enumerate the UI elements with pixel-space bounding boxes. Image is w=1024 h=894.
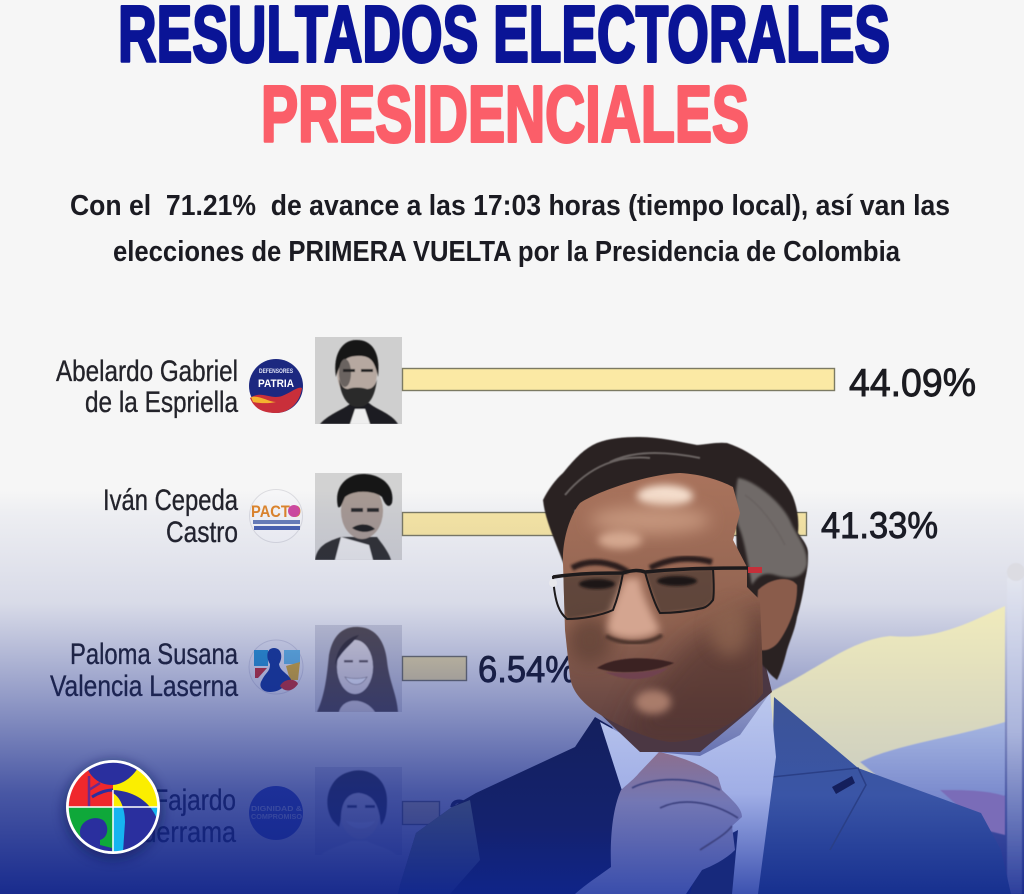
shirt bbox=[600, 693, 776, 894]
percentage: 44.09% bbox=[849, 362, 976, 405]
name: Valencia Laserna bbox=[50, 670, 238, 703]
percentage: 41.33% bbox=[821, 505, 938, 546]
name bbox=[50, 638, 238, 703]
name: Abelardo Gabriel bbox=[56, 355, 238, 388]
yellow band bbox=[770, 606, 1005, 800]
face bbox=[563, 473, 763, 742]
left sleeve bbox=[398, 800, 480, 894]
party logo: Pacto Histórico bbox=[250, 490, 302, 542]
eyes bbox=[579, 579, 615, 589]
lower-face shadow bbox=[630, 598, 763, 739]
hand bbox=[575, 752, 742, 894]
ear bbox=[754, 579, 797, 650]
row: Paloma Valencia bbox=[50, 625, 576, 712]
dark tie shadow bbox=[690, 830, 738, 894]
pole finial bbox=[1007, 563, 1024, 581]
mouth bbox=[597, 658, 674, 672]
finger lines bbox=[632, 780, 738, 850]
title: PRESIDENCIALES bbox=[261, 70, 749, 158]
subtitle: elecciones de PRIMERA VUELTA por la Presidencia de Colombia bbox=[113, 236, 901, 268]
forehead highlight bbox=[637, 485, 693, 507]
neck bbox=[598, 650, 772, 752]
row: Iván Cepeda bbox=[103, 473, 938, 560]
title bbox=[118, 0, 890, 158]
glasses bbox=[549, 568, 762, 619]
face shading bbox=[563, 480, 763, 739]
percentage: 3 bbox=[449, 793, 470, 834]
party logo: Dignidad y Compromiso: COMPROMISO bbox=[251, 814, 303, 821]
name: Valderrama bbox=[108, 816, 236, 849]
grey temple hair bbox=[736, 478, 807, 585]
eyebrows bbox=[572, 559, 712, 572]
hair bbox=[543, 437, 808, 680]
lapel notch bbox=[772, 768, 866, 850]
candidate photo bbox=[315, 767, 402, 827]
name bbox=[76, 784, 236, 849]
blue band bbox=[860, 722, 1005, 825]
five stem bbox=[89, 776, 100, 807]
spiral bbox=[80, 818, 112, 854]
candidate photo bbox=[315, 625, 402, 712]
hair strands bbox=[565, 453, 785, 545]
name: Paloma Susana bbox=[70, 638, 238, 671]
portrait: Gustavo Petro bbox=[398, 437, 1011, 894]
row: Abelardo de la Espriella bbox=[56, 337, 976, 424]
name: Iván Cepeda bbox=[103, 484, 238, 517]
party logo: Dignidad y Compromiso: DIGNIDAD & bbox=[251, 806, 302, 813]
result bar bbox=[402, 802, 440, 824]
grid lines bbox=[66, 790, 158, 854]
percentage: 6.54% bbox=[478, 649, 576, 690]
flag pole bbox=[1007, 578, 1022, 894]
subtitle: Con el 71.21% de avance a las 17:03 horas (tiempo local), así van las bbox=[70, 190, 950, 222]
name: Sergio Fajardo bbox=[76, 784, 236, 817]
channel logo: 5 bbox=[64, 760, 162, 859]
party logo: Defensores de la Patria: DEFENSORES bbox=[259, 369, 293, 375]
lens shade bbox=[553, 569, 713, 619]
result bar bbox=[402, 368, 834, 390]
blue gradient overlay bbox=[0, 490, 1024, 894]
party logo: Dignidad y Compromiso bbox=[249, 786, 303, 840]
row: Sergio Fajardo bbox=[76, 767, 470, 855]
flag of Colombia bbox=[770, 563, 1024, 894]
name: de la Espriella bbox=[85, 386, 238, 419]
party logo: Pacto Histórico: PACTO bbox=[251, 502, 301, 521]
suit left bbox=[398, 717, 720, 894]
nose bbox=[607, 578, 660, 639]
result bar bbox=[402, 512, 806, 536]
party logo: Centro Democrático bbox=[249, 640, 303, 694]
top blob bbox=[88, 762, 137, 785]
party logo: Defensores de la Patria bbox=[249, 359, 303, 413]
name bbox=[103, 484, 238, 549]
candidate photo bbox=[315, 337, 402, 424]
result bar bbox=[402, 656, 466, 680]
cheek light bbox=[710, 604, 750, 656]
red band bbox=[940, 790, 1005, 835]
party logo: Defensores de la Patria: PATRIA bbox=[258, 378, 294, 390]
subtitle bbox=[70, 190, 950, 268]
name bbox=[56, 355, 238, 419]
chin highlight bbox=[635, 690, 671, 714]
candidate photo bbox=[315, 473, 402, 560]
suit right bbox=[758, 697, 1011, 894]
lapel slit bbox=[832, 776, 855, 794]
five belly bbox=[113, 790, 158, 852]
name: Castro bbox=[166, 516, 238, 549]
